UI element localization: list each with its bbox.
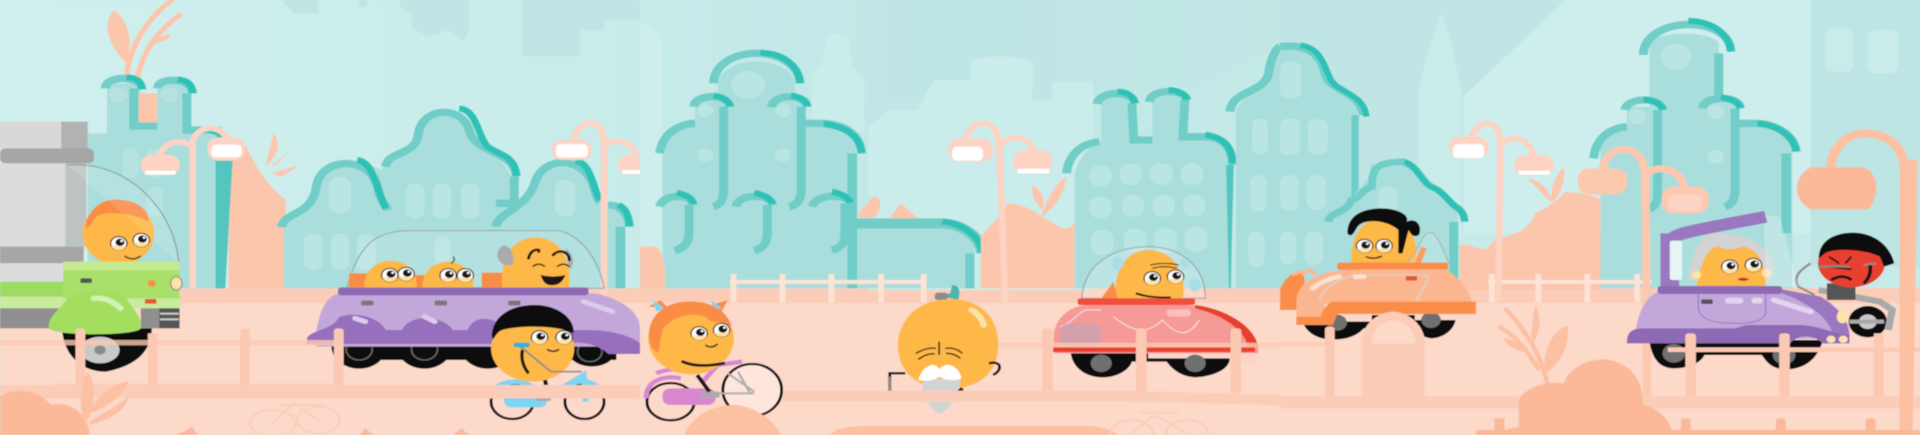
painted bicycle on road — [250, 403, 340, 435]
wheels — [1302, 315, 1456, 339]
body — [1627, 292, 1850, 340]
car body — [316, 293, 640, 347]
red car with nervous driver — [1053, 247, 1258, 377]
ground — [0, 288, 1920, 435]
dome and driver — [1082, 247, 1205, 298]
middle panel of the street — [640, 23, 1280, 435]
pink bicycle rider — [646, 300, 782, 420]
street lamp A — [141, 128, 245, 288]
body — [1296, 269, 1472, 317]
left building — [88, 77, 222, 288]
right side building middle — [1067, 90, 1234, 288]
fence left — [0, 328, 344, 390]
tower building right — [1593, 21, 1796, 288]
driver — [1688, 233, 1774, 287]
left panel of the street — [0, 0, 640, 435]
tall gable building at seam — [1230, 47, 1280, 288]
tall gable building top — [1280, 45, 1367, 288]
blue bicycle rider — [489, 305, 604, 419]
street lamp E — [1578, 149, 1709, 407]
purple family car — [307, 231, 640, 369]
street lamp B — [552, 123, 640, 302]
plant and bush foreground right — [1476, 305, 1920, 435]
windshield — [1764, 215, 1798, 287]
driver — [82, 199, 154, 265]
distant skyline middle — [640, 0, 1280, 290]
fins — [1280, 271, 1304, 310]
big street lamp — [1797, 133, 1918, 433]
green car with driver — [49, 165, 182, 372]
plants bottom left — [0, 372, 129, 435]
gabled buildings — [282, 108, 629, 288]
wheels — [1071, 350, 1230, 377]
right panel of the street — [1280, 21, 1920, 435]
red biker — [1796, 233, 1894, 337]
foreground band right — [1280, 396, 1920, 409]
wheels — [1649, 340, 1823, 369]
wheel — [62, 328, 152, 372]
old man with cane — [888, 285, 1000, 414]
plant behind left building — [107, 0, 180, 80]
mailbox arch — [1362, 312, 1425, 397]
foreground band left — [0, 385, 640, 398]
peach bush left — [229, 133, 300, 288]
dome — [347, 231, 604, 288]
peach bush right — [1460, 167, 1600, 290]
bush and curb bottom middle — [684, 405, 1118, 435]
passengers — [349, 237, 573, 288]
stepped gable building — [1328, 162, 1464, 288]
orange convertible with driver — [1280, 208, 1476, 339]
back fence right — [1488, 274, 1651, 302]
distant skyline left — [282, 0, 640, 57]
back fence middle — [730, 274, 927, 302]
fence right — [1280, 327, 1920, 400]
fence middle — [999, 328, 1280, 393]
delivery truck — [0, 122, 94, 328]
peach bushes middle — [640, 177, 1075, 288]
green fender — [49, 292, 141, 334]
windshield dome — [67, 165, 179, 263]
wheels — [331, 323, 618, 369]
car body — [1053, 305, 1258, 353]
distant skyline right — [1280, 0, 1920, 267]
tall tower building — [640, 23, 982, 288]
street lamp C — [948, 123, 1052, 302]
painted bicycle on road — [1111, 413, 1208, 435]
street lamp D — [1449, 123, 1553, 302]
ground sprouts — [176, 427, 469, 435]
small purple car with driver — [1627, 215, 1850, 369]
driver — [1347, 208, 1449, 263]
foreground band middle — [783, 391, 1280, 405]
right back building windows — [1825, 28, 1898, 73]
